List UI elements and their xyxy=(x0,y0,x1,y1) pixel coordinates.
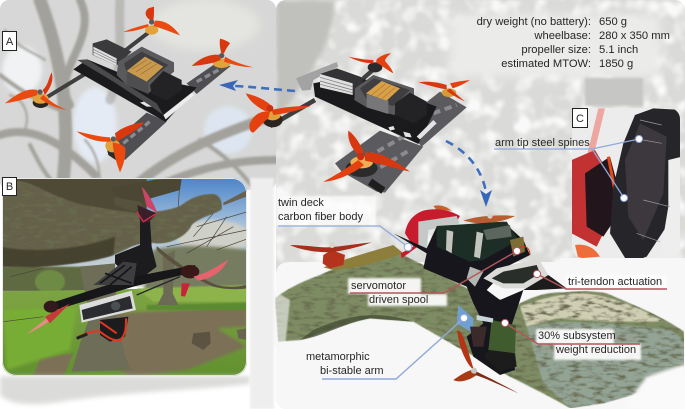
distant tree trunk xyxy=(157,250,178,305)
motors xyxy=(368,62,382,72)
specifications list: estimated MTOW: xyxy=(501,58,591,70)
callout: servomotor driven spool: servomotor xyxy=(351,280,406,292)
main body xyxy=(393,222,530,375)
ground xyxy=(2,288,247,376)
specifications list: 650 g xyxy=(599,16,627,28)
motors xyxy=(145,25,158,35)
main trunk xyxy=(72,263,132,372)
arms xyxy=(45,33,148,98)
callout: 30% subsystem weight reduction xyxy=(501,319,641,360)
specifications list: wheelbase: xyxy=(533,30,591,42)
callout: twin deck carbon fiber body xyxy=(276,196,412,251)
arm plate green xyxy=(488,320,516,353)
drone in photo xyxy=(27,187,228,342)
panel C: spine close-up xyxy=(572,108,683,263)
drone render B xyxy=(246,53,470,193)
callout: metamorphic bi-stable arm: bi-stable arm xyxy=(320,365,384,377)
callout: arm tip steel spines xyxy=(494,136,642,202)
callout: 30% subsystem weight reduction: 30% subsystem xyxy=(538,330,616,342)
deck xyxy=(73,59,197,122)
housing xyxy=(117,47,174,93)
panel: right tree backdrop xyxy=(276,0,685,300)
sky xyxy=(0,177,253,287)
lattice plates xyxy=(335,131,423,193)
callout: servomotor driven spool xyxy=(348,247,521,306)
specifications list: 5.1 inch xyxy=(599,44,638,56)
battery xyxy=(93,39,132,66)
callout: servomotor driven spool: driven spool xyxy=(369,294,428,306)
callout: metamorphic bi-stable arm xyxy=(306,314,468,379)
tendon frame xyxy=(483,258,548,288)
arrow: drone B to drone A xyxy=(219,80,295,91)
specifications list: 280 x 350 mm xyxy=(599,30,670,42)
lattice arm plates xyxy=(112,113,167,160)
label: panel B tag: B xyxy=(6,181,13,193)
strip between panels xyxy=(250,178,274,409)
bare twigs xyxy=(3,190,246,322)
front prop xyxy=(457,330,474,370)
lower-left soft shadow under panel B xyxy=(0,376,250,404)
label: panel B tag xyxy=(2,178,16,196)
deck xyxy=(313,75,437,144)
propellers xyxy=(246,53,470,182)
panel B: tree perch photo xyxy=(0,177,253,383)
battery xyxy=(320,68,365,95)
main branch xyxy=(0,178,222,267)
far prop xyxy=(463,215,515,223)
callout: metamorphic bi-stable arm: metamorphic xyxy=(306,351,370,363)
label: panel C tag xyxy=(572,108,588,128)
callout: tri-tendon actuation: tri-tendon actuation xyxy=(568,276,662,288)
perching drone photo xyxy=(290,205,567,393)
front bracket xyxy=(296,62,338,91)
drone render A xyxy=(5,7,253,172)
callout: twin deck carbon fiber body: twin deck xyxy=(278,197,324,209)
blue translucent arm xyxy=(457,305,473,333)
gold heatsink xyxy=(127,57,163,82)
background trees xyxy=(0,267,93,292)
black box xyxy=(150,71,182,101)
callout: tri-tendon actuation xyxy=(533,270,667,289)
label: panel A tag xyxy=(2,32,16,50)
callout: 30% subsystem weight reduction: weight reduction xyxy=(555,344,636,356)
specifications list: 1850 g xyxy=(599,58,633,70)
panel: top left tree backdrop xyxy=(0,0,276,190)
gold heatsink xyxy=(366,81,400,101)
arms xyxy=(270,100,315,126)
housing xyxy=(354,75,414,115)
arrow: drone B to perching drone xyxy=(446,141,492,207)
stumps xyxy=(192,332,211,350)
callout: arm tip steel spines: arm tip steel spines xyxy=(495,137,590,149)
panel: bottom white backdrop xyxy=(276,258,685,300)
callout: twin deck carbon fiber body: carbon fiber body xyxy=(278,211,363,223)
propellers xyxy=(5,7,253,172)
battery red xyxy=(401,209,460,258)
label: panel A tag: A xyxy=(6,36,14,48)
specifications list: dry weight (no battery): xyxy=(477,16,591,28)
black boxes xyxy=(395,93,427,123)
label: panel C tag: C xyxy=(576,113,584,125)
specifications list: propeller size: xyxy=(521,44,591,56)
left prop and arm xyxy=(323,245,403,270)
tree branch render xyxy=(273,247,685,409)
soft panel outline xyxy=(2,178,246,376)
specifications list xyxy=(477,16,670,70)
